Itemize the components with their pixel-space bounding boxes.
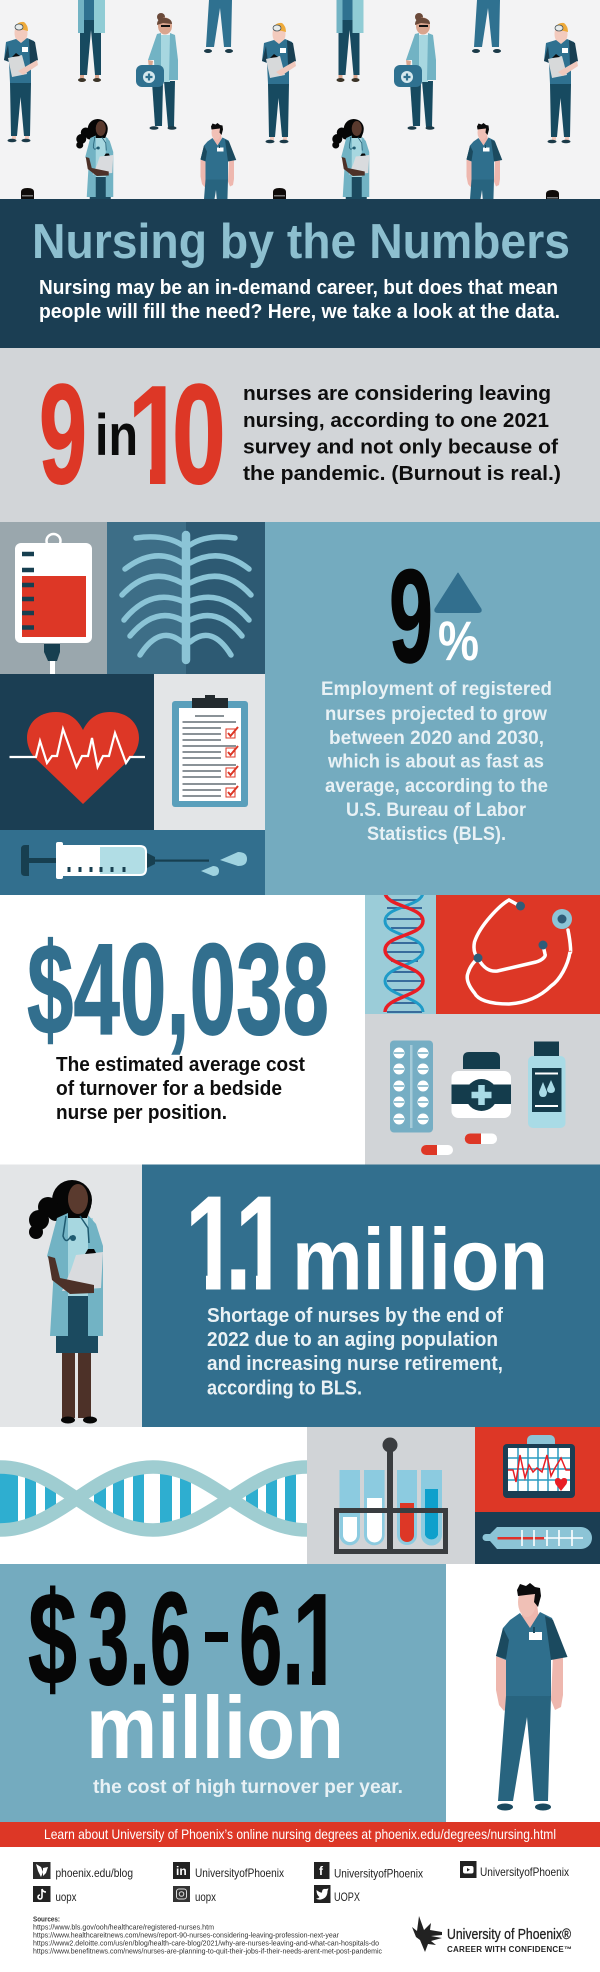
tile: syringe [0,830,265,895]
tile: heart monitor [475,1427,600,1512]
stat text: nurses projected to grow [325,704,547,725]
figure: nurse with medical bag [394,13,436,130]
panel: header [0,199,600,348]
figure: nurse with stethoscope [332,119,369,241]
icon: medicine bottle [452,1052,511,1118]
stat: $3.6-6.1: $ [28,1565,77,1712]
footer: social links [33,1861,569,1904]
stat text: nurses are considering leaving [243,382,551,405]
stat: $3.6-6.1: 3.6 [88,1565,191,1712]
tile: horizontal DNA [0,1460,307,1537]
stat text: which is about as fast as [327,752,544,772]
social: YouTube: UniversityofPhoenix [480,1865,569,1879]
stat text: Shortage of nurses by the end of [207,1305,503,1327]
logo: University of Phoenix: University of Phoenix® [447,1926,571,1943]
tile: medicine [365,1014,600,1164]
figure: nurse legs in coat [336,0,364,82]
social: blog [33,1862,133,1880]
stat text: 2022 due to an aging population [207,1329,498,1351]
tile: thermometer [475,1512,600,1564]
stat text: nurse per position. [56,1102,227,1124]
tile: ribcage [107,522,265,674]
icon: up triangle [435,573,481,612]
social: TikTok: uopx [56,1890,76,1904]
panel: 1.1 million shortage [0,1164,600,1427]
figure: male nurse [496,1583,568,1810]
stat text: Employment of registered [321,679,552,700]
panel: cost of high turnover [0,1564,600,1822]
stat: 1.1 million: 1 [184,1168,239,1318]
social: Instagram [173,1886,216,1904]
social: Facebook: UniversityofPhoenix [334,1866,423,1880]
band: medical illustrations [0,1427,600,1564]
stat text [207,1305,503,1400]
tile: IV bag [0,522,107,674]
panel: turnover cost [0,888,600,1165]
stat: 1.1 million [191,1196,544,1290]
sources: https://www2.deloitte.com/us/en/blog/health-care-blog/2021/why-are-nurses-leaving-and-what-can-hospitals-do [33,1940,379,1948]
tile: clipboard checklist [154,674,265,830]
figure: male nurse [200,123,236,237]
icon: pill blister [390,1040,433,1132]
title: Nursing by the Numbers [32,215,570,269]
figure: head at lower edge [21,188,34,199]
stat: 9 in 10 [42,383,222,485]
icon: capsules [421,1134,497,1155]
stat text: survey and not only because of [243,436,558,458]
stat: 1.1 million: million [292,1212,548,1308]
social: Facebook [314,1862,423,1880]
stat: 9 in 10: 9 [39,355,87,514]
logo: University of Phoenix [412,1916,572,1954]
sources: https://www.healthcareitnews.com/news/report-90-nurses-considering-leaving-profession-next-year [33,1932,340,1940]
tile: DNA helix [365,888,436,1014]
icon: phoenix bird [412,1916,442,1952]
figure: nurse legs in scrubs [472,0,501,53]
stat text: average, according to the [325,776,548,797]
social: Instagram: uopx [195,1890,216,1904]
stat text: nursing, according to one 2021 [243,409,549,432]
stat: 1.1 million: . [225,1168,252,1318]
intro text: people will fill the need? Here, we take a look at the data. [39,301,560,323]
panel: 9 in 10 [0,348,600,522]
figure: nurse with medical bag [136,13,178,130]
stat: million: million [86,1678,344,1777]
social: LinkedIn: in [176,1864,187,1878]
stat: $3.6-6.1: 6. [239,1565,304,1712]
figure: nurse legs in scrubs [204,0,233,53]
stat text: between 2020 and 2030, [329,728,544,749]
stat text: Statistics (BLS). [367,824,506,845]
social: YouTube [460,1861,569,1879]
social: LinkedIn [173,1862,284,1880]
figure: nurse with clipboard [4,22,38,142]
stat: 9 in 10: in [95,403,138,468]
stat text: the cost of high turnover per year. [93,1777,403,1798]
stat text: U.S. Bureau of Labor [346,800,527,821]
social: TikTok [33,1886,76,1904]
social: Twitter [314,1885,360,1904]
sources: https://www.benefitnews.com/news/nurses-are-planning-to-quit-their-jobs-if-their-needs-arent-met-post-pandemic [33,1948,382,1956]
intro text [39,277,560,323]
illustration: nurses pattern [0,0,600,241]
stat text: of turnover for a bedside [56,1078,282,1100]
stat text: the pandemic. (Burnout is real.) [243,462,561,485]
panel: 9 percent growth [0,522,600,895]
banner: call to action [0,1822,600,1847]
stat text [56,1054,305,1124]
figure: head at lower edge [546,190,559,201]
figure: nurse with clipboard [544,23,578,143]
tile: stethoscope [436,895,600,1014]
stat: $40,038: $40,038 [27,916,329,1062]
stat text: The estimated average cost [56,1054,305,1076]
tile: test tubes [307,1427,475,1564]
social: blog: phoenix.edu/blog [56,1866,133,1880]
stat: 1.1 million: 1 [234,1168,289,1318]
stat: 9 in 10: 1 [127,356,185,515]
stat: 9 in 10: 0 [172,355,226,514]
stat text: according to BLS. [207,1378,362,1400]
social: Facebook: f [319,1864,324,1878]
logo: University of Phoenix: CAREER WITH CONFIDENCE™ [447,1945,572,1954]
sources: https://www.bls.gov/ooh/healthcare/registered-nurses.htm [33,1924,214,1932]
figure: nurse with clipboard and stethoscope [29,1180,103,1424]
figure: nurse with clipboard [262,23,296,143]
social: LinkedIn: UniversityofPhoenix [195,1866,284,1880]
figure: nurse legs in coat [78,0,105,82]
stat: 9 percent with up arrow: 9 [389,543,433,691]
stat: $3.6-6.1 [28,1586,326,1694]
figure: nurse with stethoscope [76,119,113,241]
stat text [243,382,561,485]
stat: $3.6-6.1: 1 [292,1566,343,1713]
intro text: Nursing may be an in-demand career, but does that mean [39,277,558,299]
tile: heart with ECG [0,674,154,830]
figure: male nurse [466,123,502,237]
stat text: and increasing nurse retirement, [207,1353,503,1375]
icon: dropper bottle [528,1042,566,1128]
percent sign: % [438,609,479,672]
sources: Sources: [33,1916,60,1924]
social: Twitter: UOPX [334,1890,360,1904]
stat text [321,679,552,845]
figure: head at lower edge [273,188,286,199]
sources [33,1916,382,1956]
